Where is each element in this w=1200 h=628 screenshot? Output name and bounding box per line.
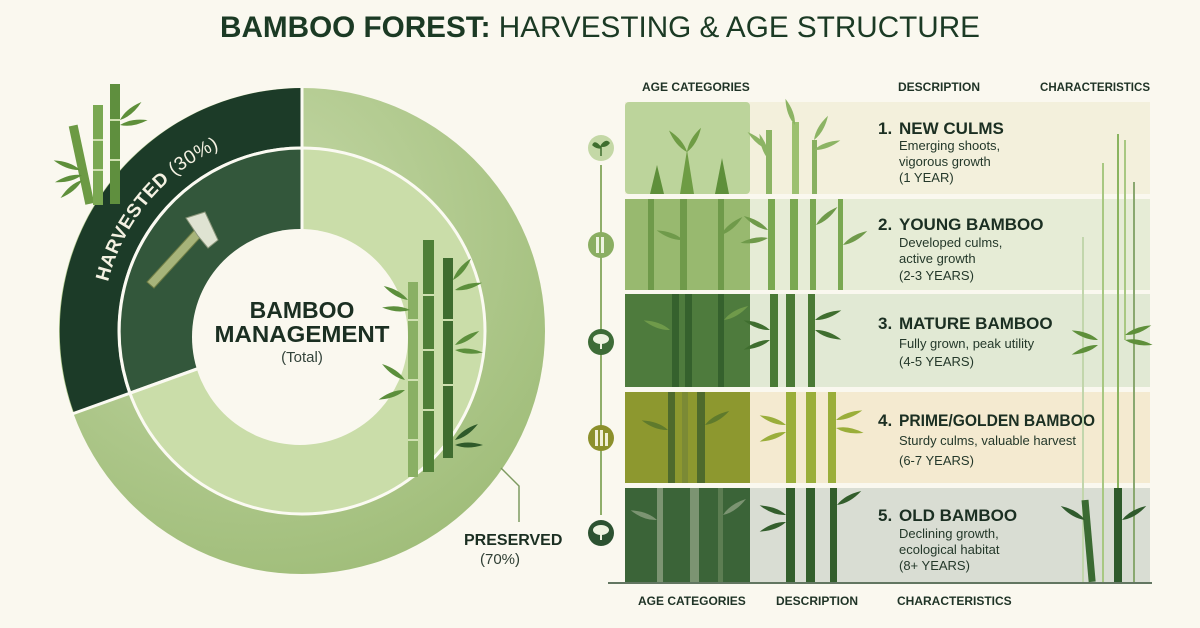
row 2: young bamboo: Developed culms,	[899, 235, 1002, 250]
icon: bamboo top-left	[53, 84, 148, 205]
row 5: old bamboo: (8+ YEARS)	[899, 558, 970, 573]
harvested label: HARVESTED (30%)	[96, 138, 218, 281]
row 4: prime/golden bamboo: (6-7 YEARS)	[899, 453, 974, 468]
row 1: new culms: 1.	[878, 119, 892, 138]
row 4: prime/golden bamboo: PRIME/GOLDEN BAMBOO	[899, 411, 1095, 430]
row 5: old bamboo: 5.	[878, 506, 892, 525]
characteristics column bamboo	[1060, 134, 1153, 582]
timeline icons	[588, 135, 614, 546]
row 2: young bamboo: (2-3 YEARS)	[899, 268, 974, 283]
icon: axe	[147, 212, 218, 288]
row 3: mature bamboo: 3.	[878, 314, 892, 333]
icon: mature tree	[588, 329, 614, 355]
icon: sprout	[588, 135, 614, 161]
center label	[214, 297, 390, 366]
preserved inner ring	[119, 148, 485, 514]
column headers: CHARACTERISTICS	[1040, 80, 1150, 94]
column headers: DESCRIPTION	[898, 80, 980, 94]
column headers	[642, 80, 1150, 94]
row 3: mature bamboo: MATURE BAMBOO	[899, 314, 1053, 333]
row 5: old bamboo: OLD BAMBOO	[899, 506, 1017, 525]
bottom labels	[638, 594, 1012, 608]
preserved label: (70%)	[480, 551, 520, 568]
preserved label: PRESERVED	[464, 532, 562, 549]
row 4: prime/golden bamboo: Sturdy culms, valuable harvest	[899, 433, 1076, 448]
harvested inner segment	[119, 148, 302, 393]
row 4: prime/golden bamboo	[625, 392, 1150, 483]
center label: BAMBOO	[250, 297, 354, 323]
row 2: young bamboo	[625, 199, 1150, 290]
row 3: mature bamboo: Fully grown, peak utility	[899, 336, 1035, 351]
harvested outer segment	[60, 88, 302, 413]
row 1: new culms: (1 YEAR)	[899, 170, 954, 185]
bottom labels: AGE CATEGORIES	[638, 594, 746, 608]
center label: MANAGEMENT	[214, 321, 390, 347]
icon: bamboo center-right	[378, 240, 483, 477]
row 3: mature bamboo: (4-5 YEARS)	[899, 354, 974, 369]
row 4: prime/golden bamboo: 4.	[878, 411, 892, 430]
bottom labels: DESCRIPTION	[776, 594, 858, 608]
row 5: old bamboo: ecological habitat	[899, 542, 1000, 557]
column headers: AGE CATEGORIES	[642, 80, 750, 94]
icon: young culms	[588, 232, 614, 258]
row 1: new culms: vigorous growth	[899, 154, 991, 169]
preserved outer ring	[59, 88, 545, 574]
donut chart	[54, 84, 562, 574]
row 1: new culms	[625, 98, 1150, 194]
row 5: old bamboo: Declining growth,	[899, 526, 999, 541]
row 1: new culms: NEW CULMS	[899, 119, 1004, 138]
icon: old tree	[588, 520, 614, 546]
center label: (Total)	[281, 349, 323, 366]
row 3: mature bamboo	[625, 294, 1150, 387]
title: BAMBOO FOREST: HARVESTING & AGE STRUCTURE	[220, 11, 980, 44]
preserved label	[464, 468, 562, 568]
center hole	[192, 229, 408, 445]
row 2: young bamboo: YOUNG BAMBOO	[899, 215, 1044, 234]
row 5: old bamboo	[625, 488, 1150, 582]
row 2: young bamboo: 2.	[878, 215, 892, 234]
row 2: young bamboo: active growth	[899, 251, 976, 266]
icon: golden culms	[588, 425, 614, 451]
bottom labels: CHARACTERISTICS	[897, 594, 1012, 608]
row 1: new culms: Emerging shoots,	[899, 138, 1000, 153]
